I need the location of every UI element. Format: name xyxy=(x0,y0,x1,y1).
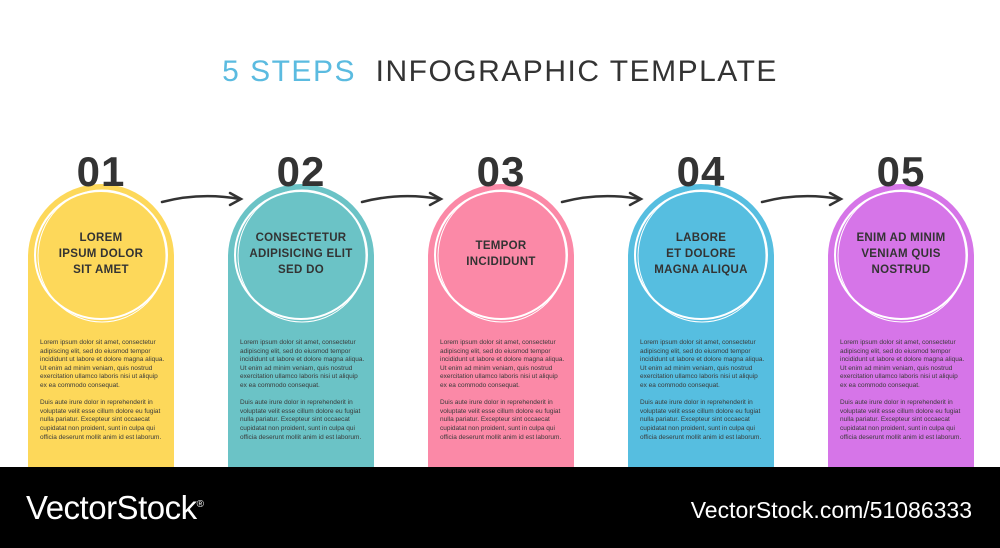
step 2: adipiscing elit, sed do eiusmod tempor xyxy=(240,348,351,355)
step 3: incididunt ut labore et dolore magna aliqua. xyxy=(440,356,564,363)
step 2: Lorem ipsum dolor sit amet, consectetur xyxy=(240,339,356,346)
step 2 xyxy=(228,184,374,467)
step 5: incididunt ut labore et dolore magna aliqua. xyxy=(840,356,964,363)
footer url: VectorStock.com/51086333 xyxy=(691,497,972,523)
step 4: nulla pariatur. Excepteur sint occaecat xyxy=(640,416,750,423)
step 4: voluptate velit esse cillum dolore eu fugiat xyxy=(640,408,760,415)
step 3: officia deserunt mollit anim id est laborum. xyxy=(440,434,561,441)
ring 1 xyxy=(34,190,168,322)
number 03: 03 xyxy=(477,148,525,195)
step 1: ex ea commodo consequat. xyxy=(40,382,120,389)
heading 4: LABORE xyxy=(676,232,726,244)
heading 4 xyxy=(654,232,748,276)
heading 1: SIT AMET xyxy=(73,264,129,276)
step 1: voluptate velit esse cillum dolore eu fugiat xyxy=(40,408,160,415)
step 1: cupidatat non proident, sunt in culpa qui xyxy=(40,425,155,432)
step 2: nulla pariatur. Excepteur sint occaecat xyxy=(240,416,350,423)
step 4: adipiscing elit, sed do eiusmod tempor xyxy=(640,348,751,355)
heading 3: TEMPOR xyxy=(476,240,526,252)
step 3: voluptate velit esse cillum dolore eu fugiat xyxy=(440,408,560,415)
step 1: exercitation ullamco laboris nisi ut aliquip xyxy=(40,373,158,380)
step 3: cupidatat non proident, sunt in culpa qui xyxy=(440,425,555,432)
heading 5: ENIM AD MINIM xyxy=(856,232,946,244)
step 3: ex ea commodo consequat. xyxy=(440,382,520,389)
arrow 1 xyxy=(160,192,244,206)
number 01: 01 xyxy=(77,148,125,195)
step 1: Duis aute irure dolor in reprehenderit in xyxy=(40,399,153,406)
title: 5 STEPS INFOGRAPHIC TEMPLATE xyxy=(222,55,778,88)
arrow 2 xyxy=(360,192,444,206)
heading 5: VENIAM QUIS xyxy=(861,248,941,260)
step 3: Duis aute irure dolor in reprehenderit in xyxy=(440,399,553,406)
heading 5: NOSTRUD xyxy=(872,264,930,276)
ring 3 xyxy=(434,190,568,322)
step 4: Ut enim ad minim veniam, quis nostrud xyxy=(640,365,752,372)
heading 2: CONSECTETUR xyxy=(256,232,346,244)
step 5: officia deserunt mollit anim id est laborum. xyxy=(840,434,961,441)
heading 3 xyxy=(466,240,536,268)
heading 3: INCIDIDUNT xyxy=(466,256,536,268)
step 1: incididunt ut labore et dolore magna aliqua. xyxy=(40,356,164,363)
step 3: Lorem ipsum dolor sit amet, consectetur xyxy=(440,339,556,346)
arrow 4 xyxy=(760,192,844,206)
step 3: Ut enim ad minim veniam, quis nostrud xyxy=(440,365,552,372)
step 2: cupidatat non proident, sunt in culpa qui xyxy=(240,425,355,432)
heading 2: SED DO xyxy=(278,264,324,276)
step 1: adipiscing elit, sed do eiusmod tempor xyxy=(40,348,151,355)
step 2: Ut enim ad minim veniam, quis nostrud xyxy=(240,365,352,372)
step 3 xyxy=(428,184,574,467)
step 5: adipiscing elit, sed do eiusmod tempor xyxy=(840,348,951,355)
number 05: 05 xyxy=(877,148,925,195)
step 4 xyxy=(628,184,774,467)
heading 1: LOREM xyxy=(79,232,123,244)
step 1: Lorem ipsum dolor sit amet, consectetur xyxy=(40,339,156,346)
step 4: ex ea commodo consequat. xyxy=(640,382,720,389)
step 1: nulla pariatur. Excepteur sint occaecat xyxy=(40,416,150,423)
step 5: exercitation ullamco laboris nisi ut aliquip xyxy=(840,373,958,380)
footer bar xyxy=(0,467,1000,548)
step 5: voluptate velit esse cillum dolore eu fugiat xyxy=(840,408,960,415)
step 4: officia deserunt mollit anim id est laborum. xyxy=(640,434,761,441)
step 3: adipiscing elit, sed do eiusmod tempor xyxy=(440,348,551,355)
step 2: Duis aute irure dolor in reprehenderit in xyxy=(240,399,353,406)
step 5: ex ea commodo consequat. xyxy=(840,382,920,389)
step 2: incididunt ut labore et dolore magna aliqua. xyxy=(240,356,364,363)
step 3: exercitation ullamco laboris nisi ut aliquip xyxy=(440,373,558,380)
step 2: voluptate velit esse cillum dolore eu fugiat xyxy=(240,408,360,415)
step 5: cupidatat non proident, sunt in culpa qui xyxy=(840,425,955,432)
ring 4 xyxy=(634,190,768,322)
step 5 xyxy=(828,184,974,467)
number 04: 04 xyxy=(677,148,725,195)
heading 2 xyxy=(249,232,353,276)
step 5: nulla pariatur. Excepteur sint occaecat xyxy=(840,416,950,423)
step 4: Lorem ipsum dolor sit amet, consectetur xyxy=(640,339,756,346)
step 3: nulla pariatur. Excepteur sint occaecat xyxy=(440,416,550,423)
heading 5 xyxy=(856,232,946,276)
step 4: incididunt ut labore et dolore magna aliqua. xyxy=(640,356,764,363)
step 4: cupidatat non proident, sunt in culpa qui xyxy=(640,425,755,432)
number 02: 02 xyxy=(277,148,325,195)
step 2: ex ea commodo consequat. xyxy=(240,382,320,389)
heading 1: IPSUM DOLOR xyxy=(59,248,143,260)
heading 2: ADIPISICING ELIT xyxy=(249,248,353,260)
step 5: Ut enim ad minim veniam, quis nostrud xyxy=(840,365,952,372)
step 1 xyxy=(28,184,174,467)
step 1: officia deserunt mollit anim id est laborum. xyxy=(40,434,161,441)
step 1: Ut enim ad minim veniam, quis nostrud xyxy=(40,365,152,372)
step 4: Duis aute irure dolor in reprehenderit in xyxy=(640,399,753,406)
step 4: exercitation ullamco laboris nisi ut aliquip xyxy=(640,373,758,380)
step 2: exercitation ullamco laboris nisi ut aliquip xyxy=(240,373,358,380)
step 5: Lorem ipsum dolor sit amet, consectetur xyxy=(840,339,956,346)
heading 1 xyxy=(59,232,143,276)
step 5: Duis aute irure dolor in reprehenderit in xyxy=(840,399,953,406)
arrow 3 xyxy=(560,192,644,206)
step 2: officia deserunt mollit anim id est laborum. xyxy=(240,434,361,441)
heading 4: MAGNA ALIQUA xyxy=(654,264,748,276)
heading 4: ET DOLORE xyxy=(666,248,736,260)
ring 5 xyxy=(834,190,968,322)
ring 2 xyxy=(234,190,368,322)
footer brand: VectorStock® xyxy=(26,489,203,526)
